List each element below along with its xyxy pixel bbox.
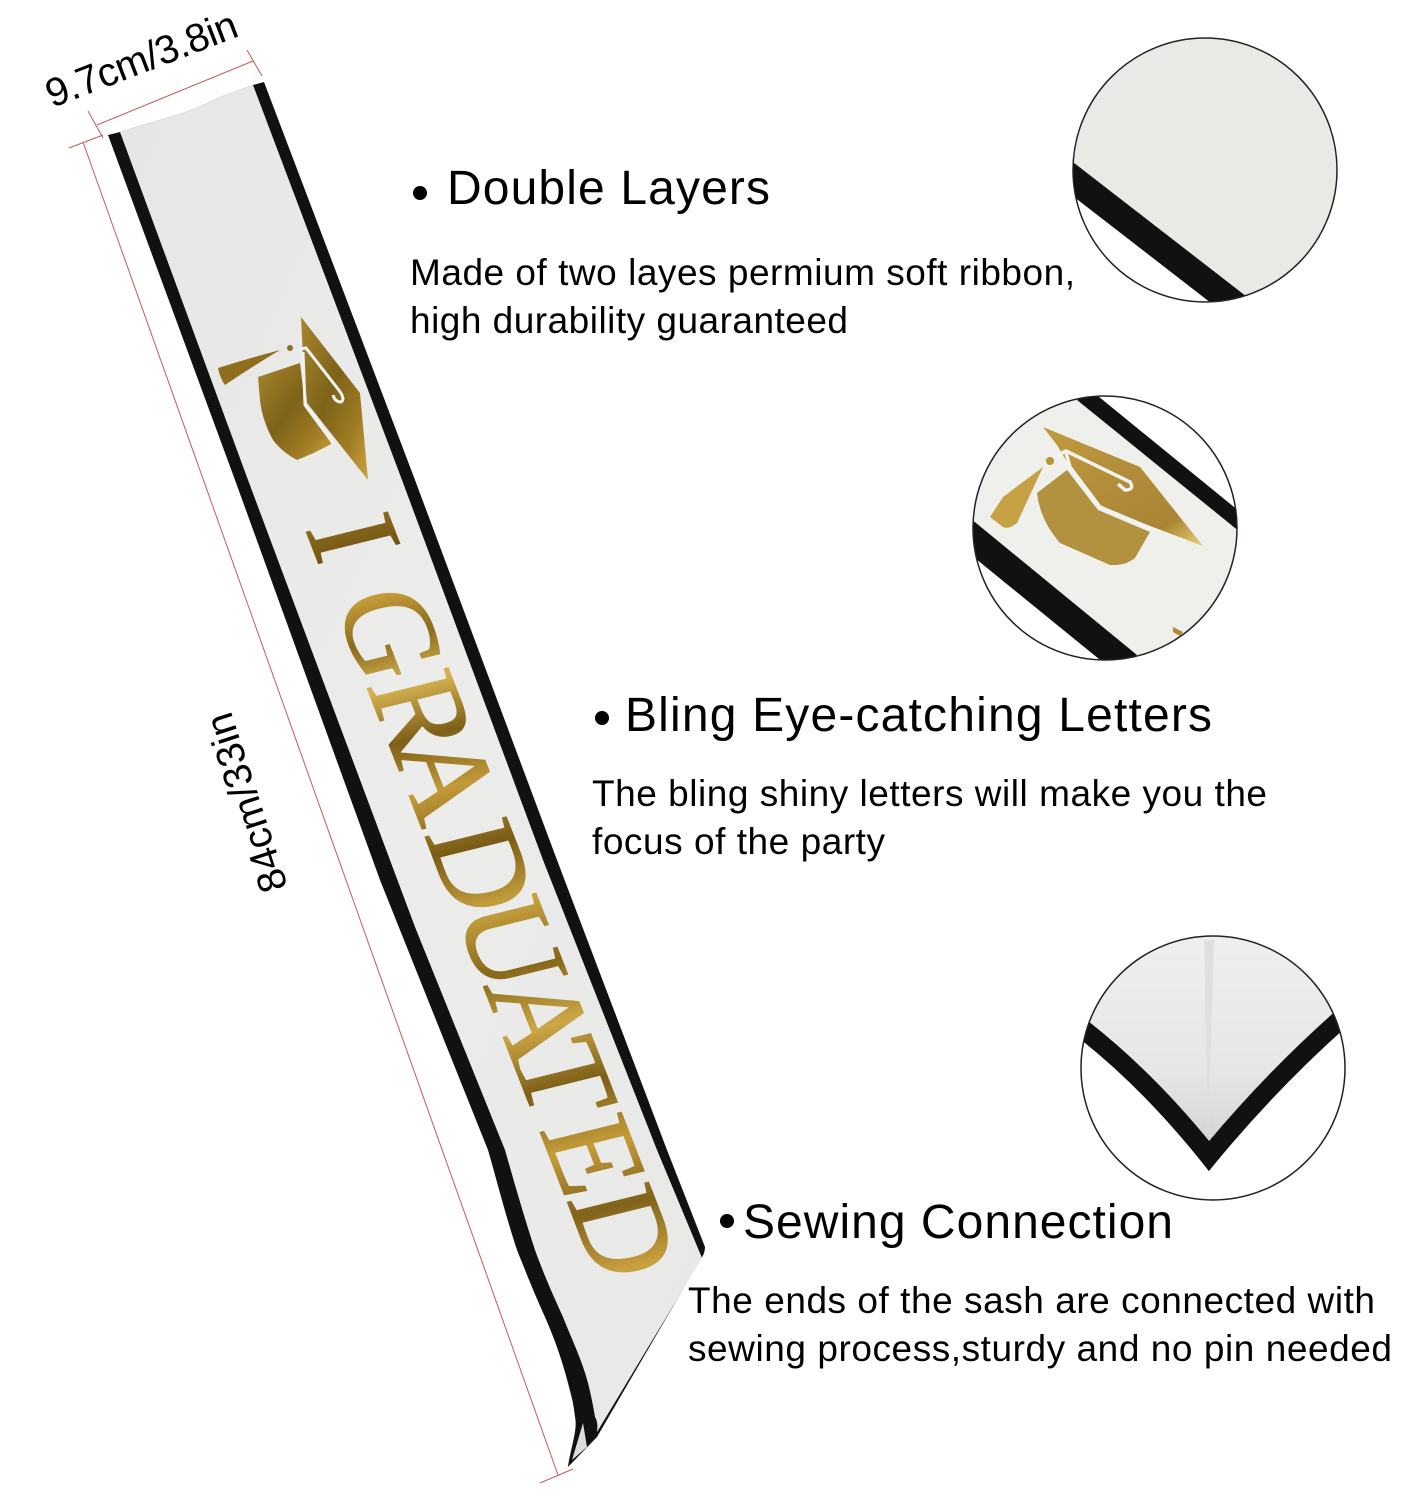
fabric closeup xyxy=(1074,38,1336,302)
cap tassel xyxy=(218,350,280,385)
description: The ends of the sash are connected with xyxy=(688,1280,1375,1321)
gold lettering: I GRADUATED xyxy=(278,501,708,1291)
graduation cap icon xyxy=(218,317,368,480)
graduation sash xyxy=(108,82,708,1467)
circle detail: sewn point xyxy=(1075,930,1355,1210)
description: The bling shiny letters will make you the xyxy=(592,773,1267,814)
cap button xyxy=(287,345,293,351)
cap skull xyxy=(258,363,333,460)
cap board xyxy=(301,317,368,480)
sash black border xyxy=(108,82,705,1467)
circle detail: gold cap xyxy=(972,395,1238,661)
width dimension lines xyxy=(88,50,262,138)
feature: bling letters xyxy=(592,689,1267,862)
length label: 84cm/33in xyxy=(197,707,297,898)
heading: Double Layers xyxy=(447,162,770,215)
circle detail: double layers xyxy=(1072,37,1338,303)
bullet xyxy=(720,1214,734,1228)
sash white fabric xyxy=(120,85,702,1432)
cap closeup xyxy=(974,396,1236,660)
circle outline xyxy=(1073,38,1337,302)
bullet xyxy=(413,186,427,200)
folded tip of sash xyxy=(572,1423,587,1460)
width label: 9.7cm/3.8in xyxy=(39,3,244,116)
heading: Sewing Connection xyxy=(743,1196,1173,1249)
description: high durability guaranteed xyxy=(410,300,848,341)
cap cord xyxy=(299,348,343,443)
length dimension lines xyxy=(69,135,573,1483)
description: Made of two layes permium soft ribbon, xyxy=(410,252,1075,293)
description: focus of the party xyxy=(592,821,886,862)
seam closeup xyxy=(1084,936,1340,1172)
feature: double layers xyxy=(410,162,1075,341)
description: sewing process,sturdy and no pin needed xyxy=(688,1328,1392,1369)
heading: Bling Eye-catching Letters xyxy=(625,689,1212,742)
circle outline xyxy=(1081,936,1345,1200)
circle outline xyxy=(973,396,1237,660)
bullet xyxy=(595,711,609,725)
feature: sewing connection xyxy=(688,1196,1392,1369)
